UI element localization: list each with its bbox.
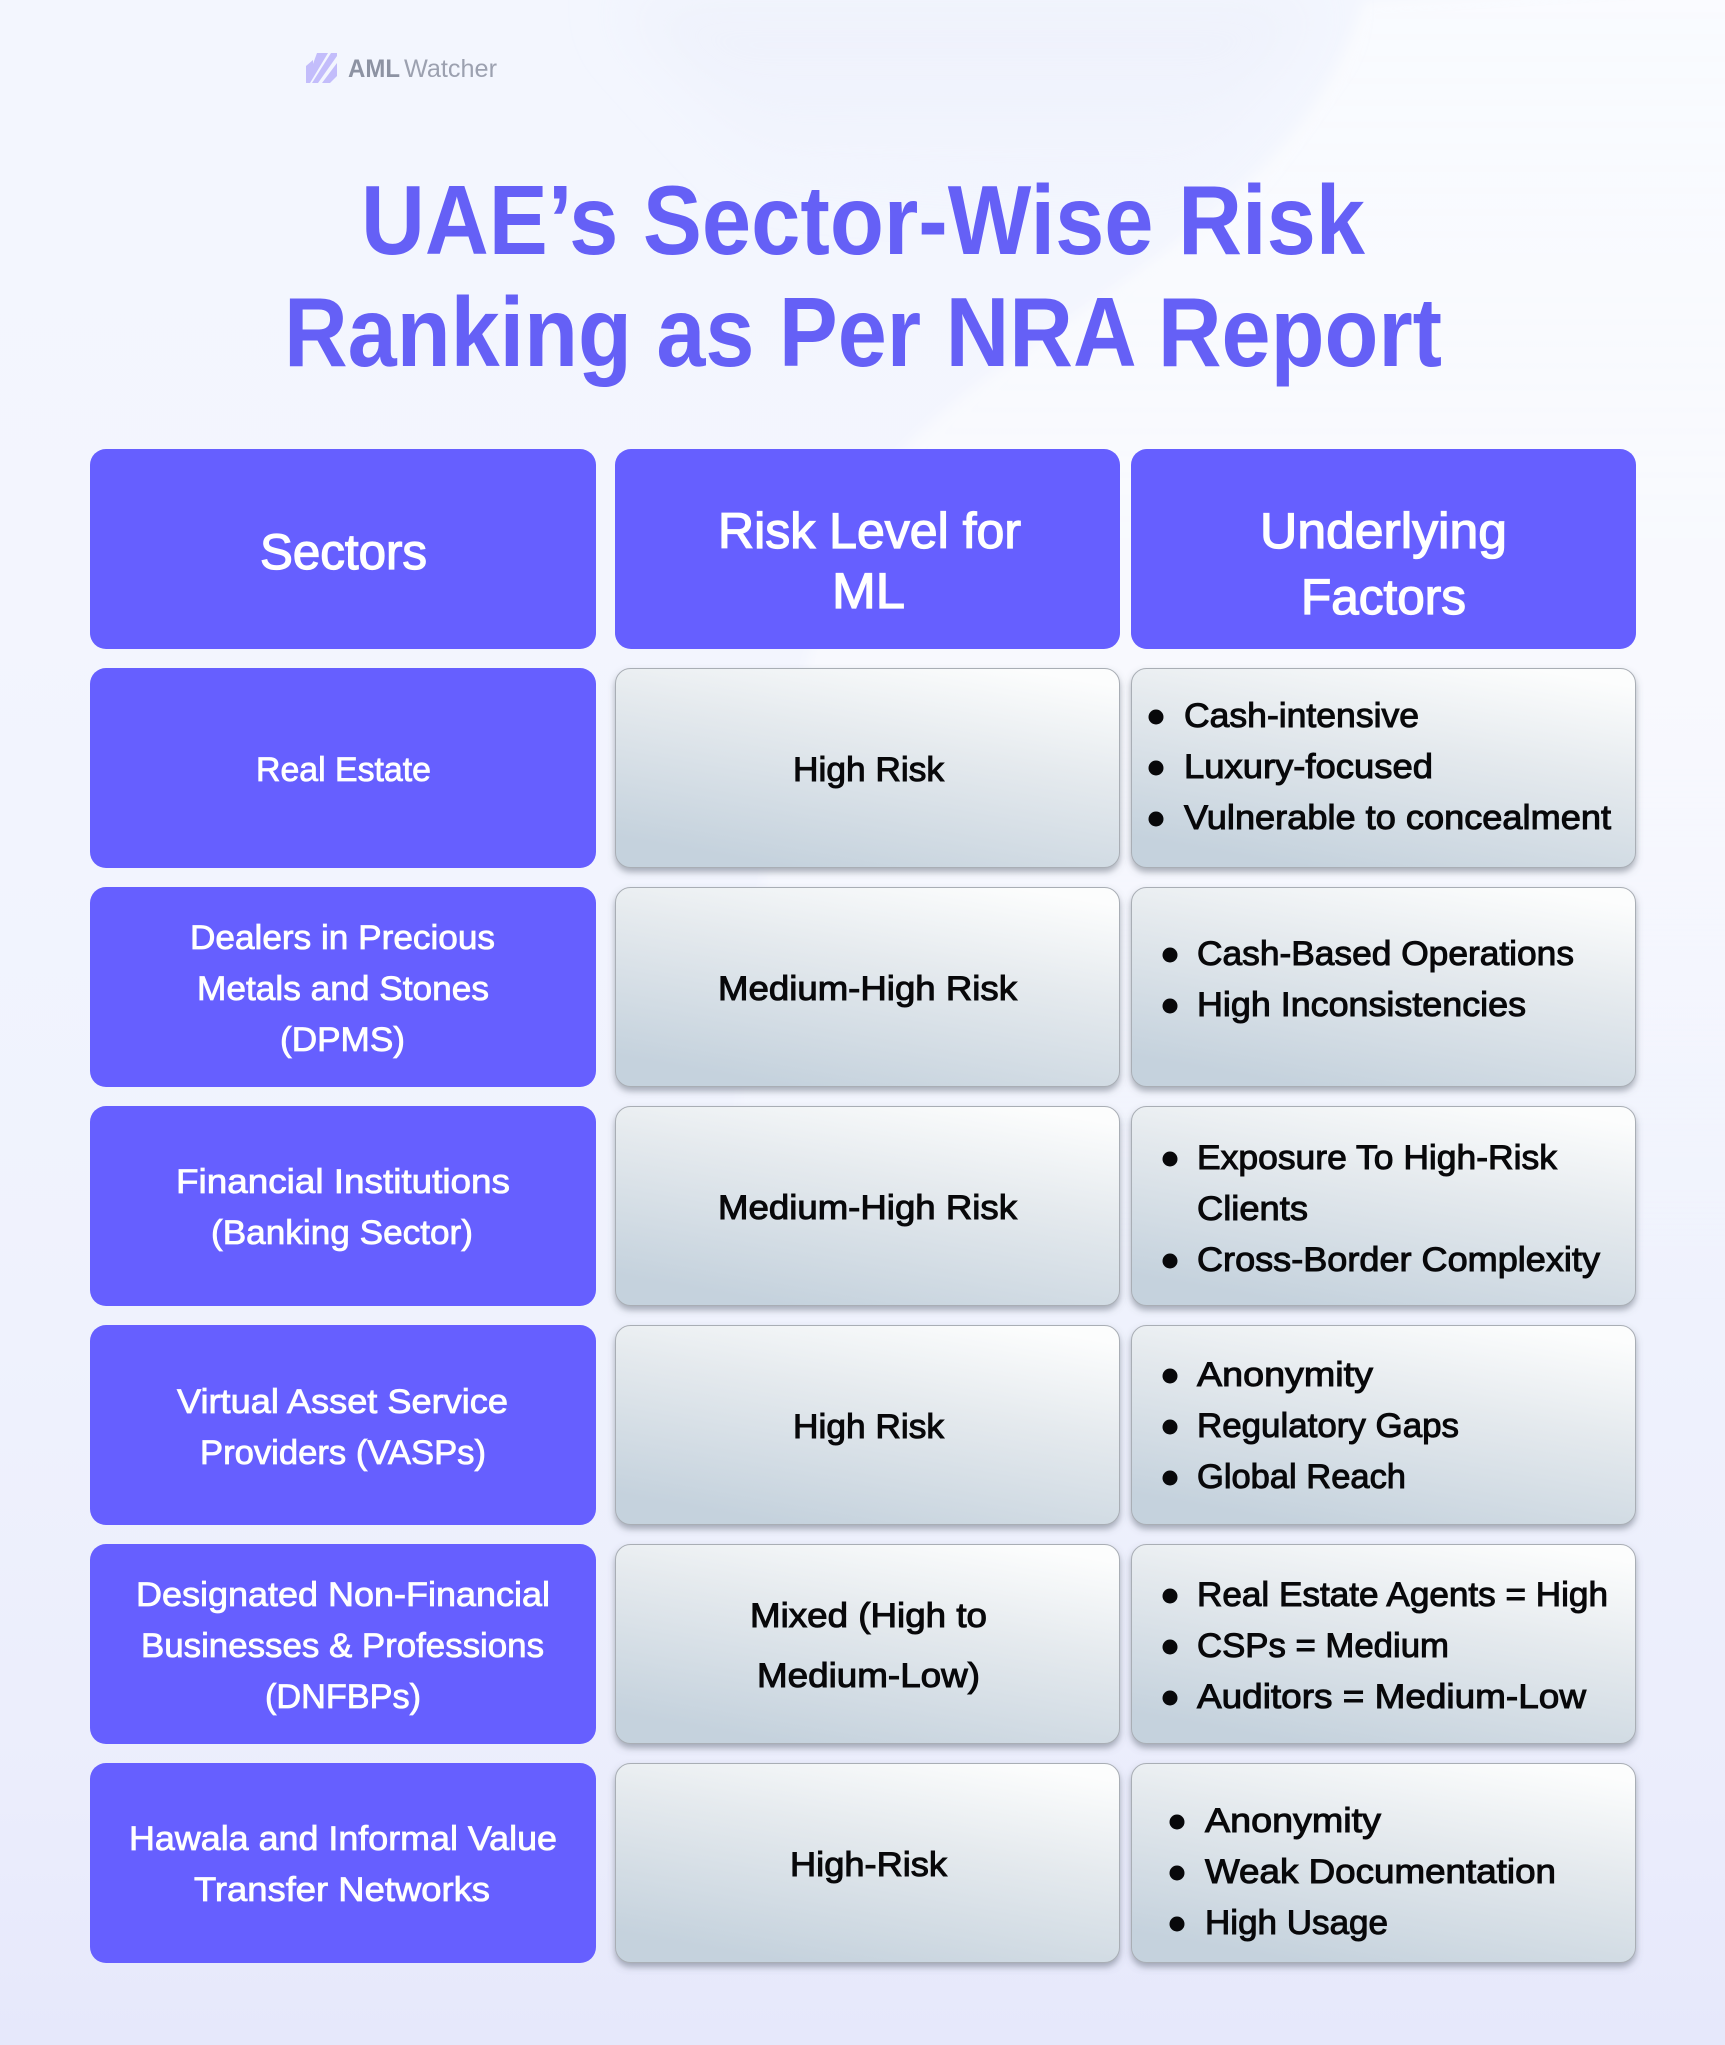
logo: AML Watcher	[306, 53, 497, 83]
header: Underlying Factors: Factors	[1301, 569, 1466, 625]
factors cell	[1132, 888, 1636, 1086]
sector cell: Transfer Networks	[194, 1871, 490, 1909]
header: Risk Level for ML: Risk Level for	[718, 503, 1021, 559]
risk cell	[616, 668, 1120, 868]
sector cell: Financial Institutions	[176, 1163, 510, 1201]
sector cell: (DNFBPs)	[265, 1678, 421, 1716]
header: Sectors: Sectors	[260, 524, 427, 580]
icon: striped logo mark	[306, 53, 337, 83]
factors cell	[1132, 668, 1636, 868]
risk cell: High Risk	[793, 751, 945, 789]
factors cell: Real Estate Agents = High	[1197, 1576, 1608, 1614]
factors cell: Cash-Based Operations	[1197, 935, 1574, 973]
row: DNFBPs	[90, 1544, 1636, 1744]
table header row	[90, 449, 1636, 649]
sector cell	[90, 1763, 596, 1963]
risk cell: Medium-High Risk	[718, 1189, 1018, 1227]
factors cell: High Usage	[1205, 1904, 1388, 1942]
sector cell: Metals and Stones	[197, 970, 489, 1008]
sector cell: Virtual Asset Service	[177, 1383, 508, 1421]
factors cell	[1132, 1764, 1636, 1962]
sector cell: Providers (VASPs)	[200, 1434, 486, 1472]
title: Ranking as Per NRA Report	[284, 277, 1442, 387]
factors cell: High Inconsistencies	[1197, 986, 1526, 1024]
factors cell	[1132, 1544, 1636, 1744]
logo wordmark: AML	[348, 55, 400, 83]
sector cell: (Banking Sector)	[211, 1214, 473, 1252]
factors cell	[1132, 1326, 1636, 1524]
factors cell: Luxury-focused	[1184, 748, 1433, 786]
sector cell	[90, 1325, 596, 1525]
risk cell	[616, 1544, 1120, 1744]
factors cell: Clients	[1197, 1190, 1308, 1228]
sector cell: Dealers in Precious	[190, 919, 495, 957]
sector cell	[90, 668, 596, 868]
factors cell: Auditors = Medium-Low	[1197, 1678, 1586, 1716]
header: Underlying Factors	[1131, 449, 1636, 649]
risk cell: High Risk	[793, 1408, 945, 1446]
header: Risk Level for ML	[615, 449, 1120, 649]
row: Real Estate	[90, 668, 1636, 868]
title: UAE’s Sector-Wise Risk	[361, 165, 1365, 275]
risk cell: Medium-High Risk	[718, 970, 1018, 1008]
sector cell: Businesses & Professions	[141, 1627, 544, 1665]
factors cell: Cash-intensive	[1184, 697, 1419, 735]
risk cell	[616, 1764, 1120, 1962]
logo wordmark: Watcher	[404, 55, 497, 83]
row: VASPs	[90, 1325, 1636, 1525]
sector cell: (DPMS)	[280, 1021, 405, 1059]
factors cell: Anonymity	[1197, 1356, 1373, 1394]
risk cell	[616, 1326, 1120, 1524]
sector cell	[90, 1106, 596, 1306]
factors cell: Anonymity	[1205, 1802, 1381, 1840]
factors cell: Weak Documentation	[1205, 1853, 1556, 1891]
row: Hawala	[90, 1763, 1636, 1963]
risk cell: Medium-Low)	[757, 1657, 980, 1695]
factors cell: Exposure To High-Risk	[1197, 1139, 1558, 1177]
factors cell: Vulnerable to concealment	[1184, 799, 1612, 837]
sector cell: Real Estate	[256, 751, 431, 789]
risk cell	[616, 1106, 1120, 1306]
sector cell	[90, 1544, 596, 1744]
factors cell: CSPs = Medium	[1197, 1627, 1449, 1665]
risk cell: High-Risk	[790, 1846, 948, 1884]
factors cell: Regulatory Gaps	[1197, 1407, 1459, 1445]
row: Financial Institutions	[90, 1106, 1636, 1306]
risk cell	[616, 888, 1120, 1086]
sector cell	[90, 887, 596, 1087]
factors cell: Cross-Border Complexity	[1197, 1241, 1600, 1279]
row: DPMS	[90, 887, 1636, 1087]
sector cell: Designated Non-Financial	[136, 1576, 550, 1614]
factors cell	[1132, 1106, 1636, 1306]
risk cell: Mixed (High to	[750, 1597, 987, 1635]
sector cell: Hawala and Informal Value	[129, 1820, 557, 1858]
header: Sectors	[90, 449, 596, 649]
title	[284, 165, 1442, 387]
factors cell: Global Reach	[1197, 1458, 1406, 1496]
header: Risk Level for ML: ML	[832, 563, 905, 619]
header: Underlying Factors: Underlying	[1260, 503, 1507, 559]
